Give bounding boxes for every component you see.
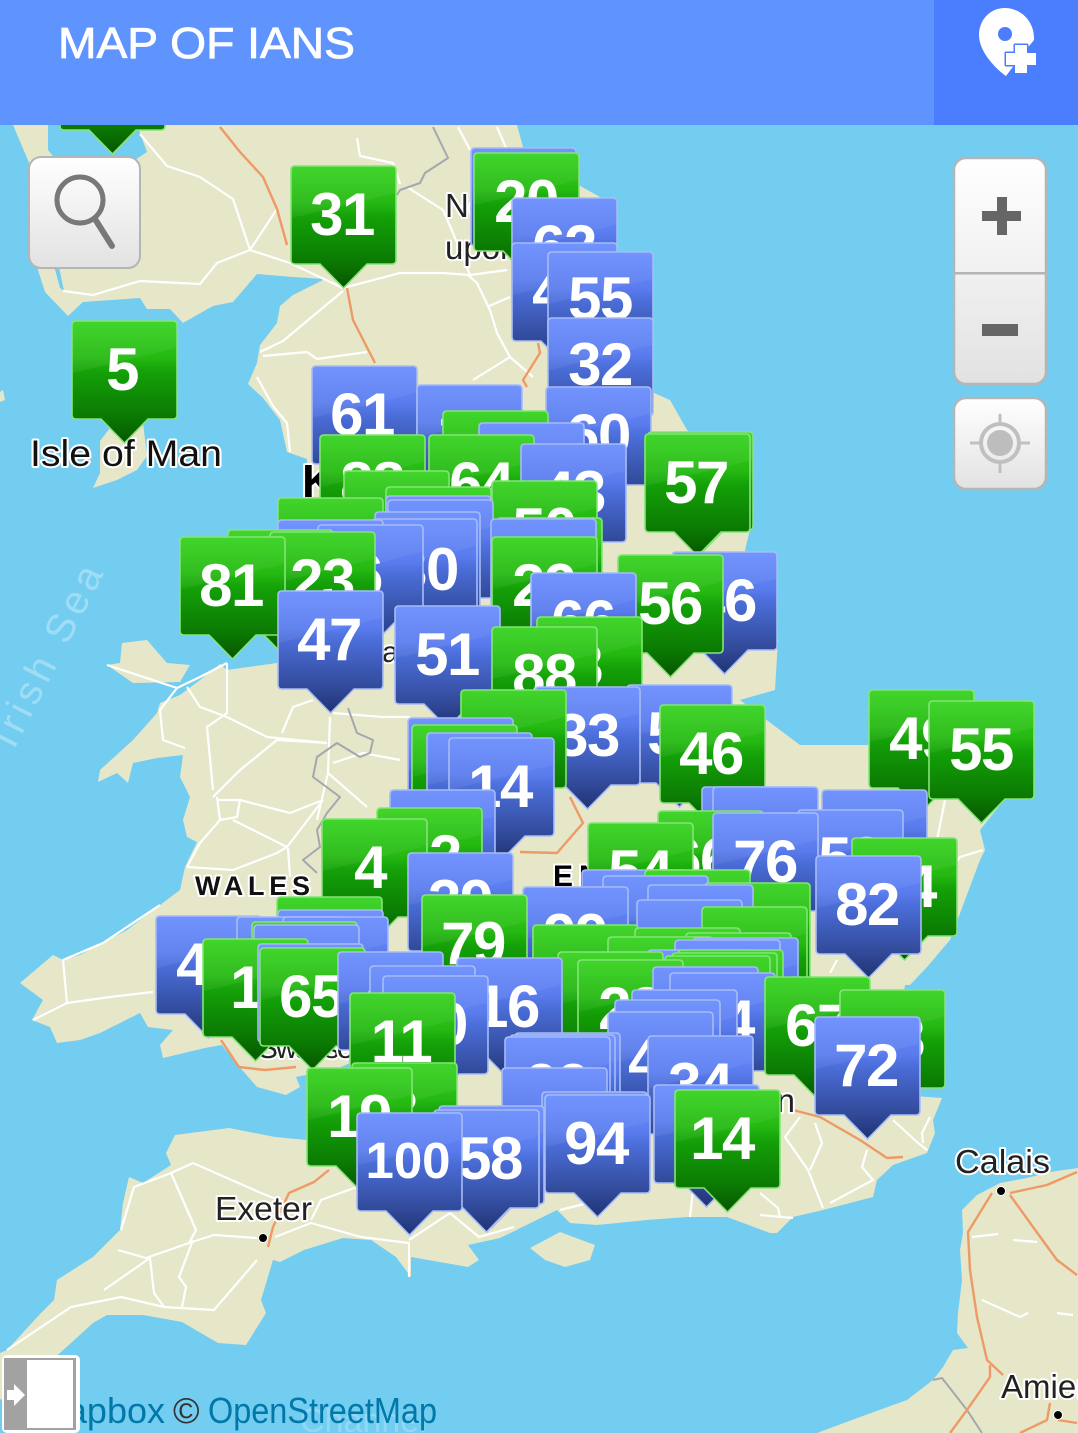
marker: blue stacked [390, 790, 495, 912]
marker: blue 30: 30 [394, 536, 458, 603]
marker: green stacked [277, 897, 382, 1019]
marker: blue stacked [637, 900, 742, 1022]
marker: green 65: 65 [279, 963, 343, 1030]
marker: blue 58 east [798, 810, 903, 932]
marker: green 57: 57 [664, 449, 728, 516]
map label: Exeter: Exeter [215, 1190, 312, 1227]
marker: blue 99 south: 99 [525, 1052, 589, 1119]
marker: green 11: 11 [371, 1008, 431, 1075]
marker: green 57 [645, 434, 750, 556]
marker: blue 46 [672, 552, 777, 674]
marker: blue stacked [479, 423, 584, 545]
marker: blue stacked [427, 733, 532, 855]
marker: blue 82: 82 [835, 871, 899, 938]
marker: blue 33 [535, 687, 640, 809]
marker: blue stacked [582, 870, 687, 992]
marker: green 23: 23 [290, 547, 354, 614]
map label: Newcastle upon Tyne: Newcastle [445, 187, 597, 224]
map label: Manchester fragment: a [382, 636, 399, 669]
marker: blue 46: 46 [692, 567, 756, 634]
marker: green 28: 28 [860, 1005, 924, 1072]
marker: blue stacked [632, 990, 737, 1112]
icon: zoom out minus [982, 324, 1018, 336]
marker: green stacked [443, 411, 548, 533]
marker: blue 34: 34 [668, 1051, 734, 1118]
marker: green 22: 22 [598, 975, 662, 1042]
marker: green 54: 54 [608, 838, 674, 905]
marker: green stacked [252, 922, 357, 1044]
marker: blue 34 [648, 1036, 753, 1158]
marker: blue 30 [372, 519, 477, 641]
marker: green stacked [686, 933, 791, 1055]
marker: green 49: 49 [889, 705, 953, 772]
marker: green 19: 19 [327, 1083, 391, 1150]
marker: green 67: 67 [785, 992, 849, 1059]
marker: blue 31: 31 [674, 1100, 738, 1167]
map label: WALES: WALES [195, 871, 310, 901]
marker: blue 16 [457, 958, 562, 1080]
marker: blue 99: 99 [543, 902, 607, 969]
marker: green 79 [422, 895, 527, 1017]
marker: blue stacked [388, 500, 493, 622]
marker: blue stacked [408, 718, 513, 840]
sidebar toggle button [2, 1355, 80, 1433]
marker: green 56 [618, 555, 723, 677]
marker: blue stacked [370, 966, 475, 1088]
marker: green 67 [765, 977, 870, 1099]
marker: blue stacked [693, 938, 798, 1060]
marker: green 31: 31 [310, 181, 374, 248]
marker: green stacked [278, 498, 383, 620]
marker: blue stacked [515, 1033, 620, 1155]
marker: blue 62 [512, 198, 617, 320]
marker: green 81: 81 [199, 552, 263, 619]
marker: green 79: 79 [441, 910, 505, 977]
marker: green stacked [461, 690, 566, 812]
marker: green stacked [705, 883, 810, 1005]
marker: green 54 [588, 823, 693, 945]
marker: blue 45 [512, 243, 617, 365]
marker: green 64: 64 [449, 450, 515, 517]
marker: blue 44 east [670, 973, 775, 1095]
marker: blue 76 [713, 813, 818, 935]
marker: blue 15: 15 [437, 400, 501, 467]
marker: green 55 east [929, 701, 1034, 823]
marker: blue 94 [545, 1095, 650, 1217]
marker: green stacked [645, 870, 750, 992]
marker: blue 100 [357, 1113, 462, 1235]
marker: blue 43: 43 [541, 459, 605, 526]
marker: blue 99 [523, 887, 628, 1009]
marker: blue 55: 55 [568, 265, 632, 332]
attribution: copyright: © [173, 1390, 200, 1431]
map label: Calais: Calais [955, 1143, 1050, 1180]
zoom control [954, 158, 1046, 384]
marker: green stacked [497, 518, 602, 640]
icon: add location pin [979, 8, 1036, 76]
marker: green behind 81 [228, 530, 333, 652]
marker: blue 82 [816, 856, 921, 978]
marker: green 46: 46 [679, 720, 743, 787]
marker: green 50 [492, 481, 597, 603]
marker: blue 100: 100 [365, 1132, 451, 1189]
map label: Kendal: KENDAL [302, 455, 494, 507]
marker: green 32 [377, 808, 482, 930]
marker: green 46 [660, 705, 765, 827]
marker: green 14 [675, 1090, 780, 1212]
icon: magnifier [57, 177, 112, 246]
marker: blue 51: 51 [415, 621, 479, 688]
marker: blue stacked [603, 876, 708, 998]
map label: upon Tyne: upon Tyne [445, 229, 599, 266]
attribution [37, 1390, 437, 1431]
marker: blue 31 [654, 1085, 759, 1207]
marker: blue 14: 14 [468, 753, 534, 820]
marker: blue stacked [237, 917, 342, 1039]
marker: blue 45: 45 [532, 258, 596, 325]
marker: green 18: 18 [353, 1078, 417, 1145]
map dot: Exeter [258, 1234, 268, 1242]
marker: green 55 east: 55 [949, 716, 1013, 783]
marker: blue 10: 10 [403, 991, 467, 1058]
marker: green behind 57 [648, 432, 753, 554]
marker: blue behind 58 [439, 1106, 544, 1228]
marker: blue 66 [531, 573, 636, 695]
marker: blue 45 west [156, 916, 261, 1038]
marker: green 66 [658, 811, 763, 933]
marker: green 65 [260, 948, 365, 1070]
marker: blue behind 20 [471, 148, 576, 270]
map dot: Calais [996, 1186, 1006, 1196]
marker: blue 32: 32 [568, 331, 632, 398]
marker: green 32: 32 [397, 823, 461, 890]
icon: arrow [7, 1384, 25, 1406]
marker: green 34 [852, 838, 957, 960]
marker: blue stacked [713, 787, 818, 909]
marker: green 28 [840, 990, 945, 1112]
marker: green stacked [702, 907, 807, 1029]
search button [29, 157, 140, 268]
marker: green 20 [474, 153, 579, 275]
marker: green 34: 34 [872, 853, 938, 920]
icon: locate target [970, 414, 1030, 473]
marker: green stacked [678, 950, 783, 1072]
marker: green 5: 5 [106, 336, 138, 403]
marker: green 17: 17 [230, 954, 294, 1021]
marker: green 29 [492, 537, 597, 659]
marker: blue 66: 66 [551, 588, 615, 655]
marker: green 4 [322, 819, 427, 941]
marker: blue stacked [254, 925, 359, 1047]
marker: blue 44: 44 [358, 967, 424, 1034]
marker: blue 60 [546, 387, 651, 509]
marker: green 14: 14 [690, 1105, 756, 1172]
marker: blue 58 south [434, 1110, 539, 1232]
marker: blue 15 [417, 385, 522, 507]
heading: MAP OF IANS: MAP OF IANS [58, 19, 355, 68]
marker: blue stacked [491, 519, 596, 641]
marker: blue 45 west: 45 [176, 931, 240, 998]
marker: blue 53 [627, 685, 732, 807]
marker: green 50: 50 [512, 496, 576, 563]
marker: blue stacked [386, 496, 491, 618]
marker: blue 36: 36 [318, 542, 382, 609]
map label: Isle of Man: Isle of Man [30, 433, 222, 474]
map label: England: ENGLAND [553, 860, 743, 893]
marker: green 81 [180, 537, 285, 659]
marker: blue 32 [548, 318, 653, 440]
marker: green stacked [608, 937, 713, 1059]
marker: blue 16: 16 [475, 973, 539, 1040]
marker: blue 60: 60 [566, 402, 630, 469]
marker: blue stacked [648, 885, 753, 1007]
marker: green 20: 20 [494, 168, 558, 235]
marker: green 58: 58 [538, 632, 602, 699]
marker: green stacked [665, 956, 770, 1078]
marker: blue stacked [278, 910, 383, 1032]
marker: blue stacked [648, 950, 753, 1072]
marker: blue 33: 33 [555, 702, 619, 769]
marker: blue 72 [815, 1017, 920, 1139]
marker: blue 76: 76 [733, 828, 797, 895]
marker: blue 44 [338, 952, 443, 1074]
marker: blue stacked [278, 520, 383, 642]
marker: blue 62: 62 [532, 213, 596, 280]
marker: green 88 [492, 627, 597, 749]
marker: green 29: 29 [512, 552, 576, 619]
attribution: OpenStreetMap: OpenStreetMap [208, 1390, 437, 1431]
marker: green top edge [60, 32, 165, 154]
marker: green stacked [635, 928, 740, 1050]
marker: blue stacked [822, 790, 927, 912]
marker: blue 58 east: 58 [818, 825, 882, 892]
marker: blue 47 [278, 591, 383, 713]
marker: blue 36 [318, 525, 423, 647]
marker: green 88 north [320, 435, 425, 557]
marker: blue 53: 53 [647, 700, 711, 767]
attribution: Mapbox: Mapbox [37, 1390, 165, 1431]
marker: blue 99 south [505, 1037, 610, 1159]
marker: green stacked [672, 953, 777, 1075]
marker: blue stacked [675, 940, 780, 1062]
marker: green 88: 88 [512, 642, 576, 709]
marker: green 22 [578, 960, 683, 1082]
marker: blue stacked [283, 917, 388, 1039]
marker: green stacked [412, 725, 517, 847]
marker: blue 43 [521, 444, 626, 566]
marker: blue 39 [408, 853, 513, 975]
marker: blue 61: 61 [330, 381, 394, 448]
marker: blue 55 [548, 252, 653, 374]
locate button [954, 398, 1046, 489]
marker: green 64 [429, 435, 534, 557]
marker: blue stacked [702, 787, 807, 909]
marker: green 4: 4 [354, 834, 388, 901]
marker: blue 94: 94 [564, 1110, 630, 1177]
marker: green 23 [270, 532, 375, 654]
marker: blue 51 [395, 606, 500, 728]
marker: green 31 [291, 166, 396, 288]
marker: green stacked [344, 471, 449, 593]
marker: blue 44 east: 44 [690, 988, 756, 1055]
marker: blue 72: 72 [834, 1032, 898, 1099]
marker layer [60, 32, 1034, 1235]
marker: blue stacked [502, 1068, 607, 1190]
marker: green stacked [386, 487, 491, 609]
marker: green 66: 66 [668, 826, 732, 893]
marker: green 18 [352, 1063, 457, 1185]
marker: blue 61 [312, 366, 417, 488]
marker: green 11 [350, 993, 455, 1115]
map label: Swansea: Swansea [258, 1032, 368, 1065]
marker: blue 14 [449, 738, 554, 860]
marker: green 56: 56 [638, 570, 702, 637]
marker: green 17 [203, 939, 308, 1061]
marker: blue 42 [608, 1012, 713, 1134]
marker: blue stacked [375, 512, 480, 634]
header bar [0, 0, 1078, 125]
icon: zoom in plus [982, 197, 1021, 235]
marker: blue stacked [510, 1035, 615, 1157]
marker: blue 42: 42 [628, 1027, 692, 1094]
marker: green stacked [533, 925, 638, 1047]
marker: blue stacked [615, 1000, 720, 1122]
marker: blue 58 south: 58 [458, 1125, 522, 1192]
marker: blue behind 94 [542, 1092, 647, 1214]
marker: green 58 [537, 617, 642, 739]
marker: blue stacked [653, 967, 758, 1089]
marker: blue 10 [383, 976, 488, 1098]
marker: green 88 north: 88 [340, 450, 404, 517]
marker: blue behind 65 [258, 944, 363, 1066]
marker: blue 47: 47 [297, 606, 361, 673]
marker: blue 39: 39 [428, 868, 492, 935]
marker: green 5 [72, 321, 177, 443]
marker: green stacked [558, 952, 663, 1074]
marker: green 19 [307, 1068, 412, 1190]
map dot: Amiens [1054, 1410, 1062, 1420]
marker: green 49 [869, 690, 974, 812]
map label: London: London [685, 1082, 795, 1119]
